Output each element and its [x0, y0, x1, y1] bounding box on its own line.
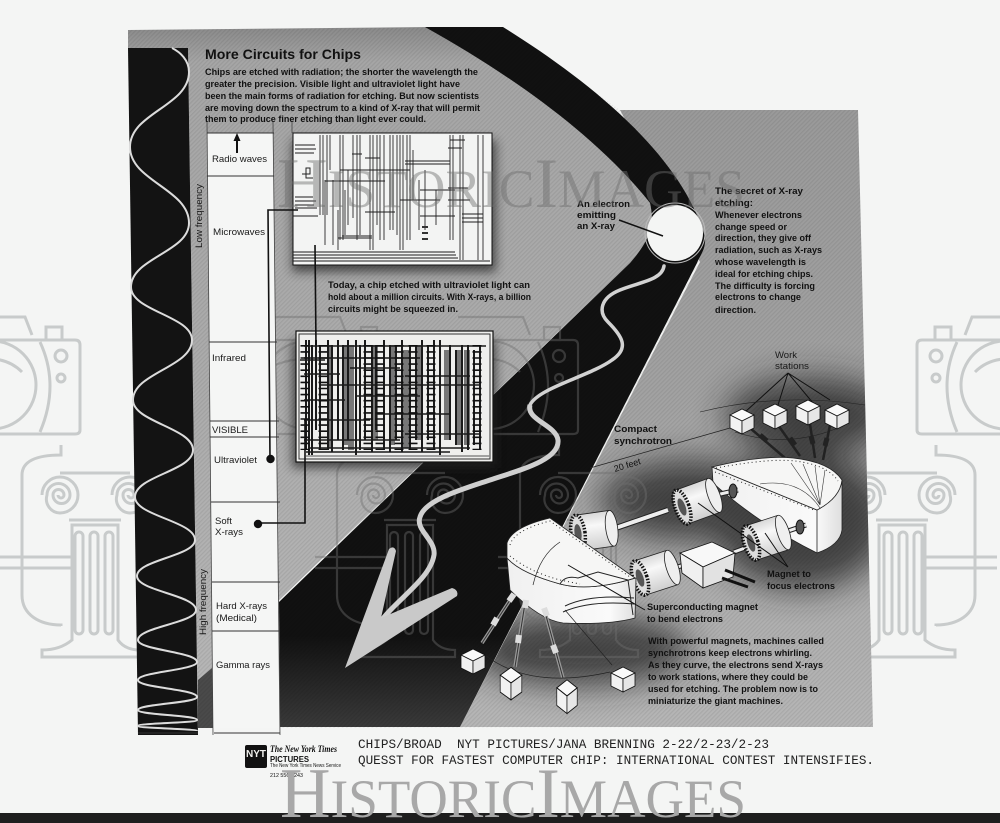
text: the secret of x-ray etching: [714, 186, 822, 315]
connector: ultraviolet to first chip: [267, 210, 298, 462]
spectrum label: microwaves: Microwaves: [213, 227, 265, 238]
label: electron emitting x-ray: an X-ray: [577, 221, 616, 231]
text: the secret of x-ray etching: electrons to change: [715, 292, 801, 302]
label: superconducting magnet: [647, 602, 758, 624]
magnet cylinder: lower right: [739, 514, 795, 562]
dimension line: 20 feet: 20 feet: [613, 456, 642, 474]
rods: [610, 490, 806, 570]
panel: left gray background: [128, 27, 652, 728]
spectrum label: hard x-rays: (Medical): [216, 613, 257, 624]
text: the secret of x-ray etching: Whenever electrons: [715, 210, 802, 220]
label: magnet to focus electrons: [767, 569, 835, 591]
axis label: high frequency: High frequency: [198, 569, 209, 635]
dimension line: 20 feet: [590, 428, 730, 474]
callout line: electron: [619, 220, 663, 236]
logo: NYT Pictures: The New York Times News Service: [270, 763, 341, 769]
diagram: compact synchrotron machine: [461, 400, 865, 714]
text: with powerful magnets: [648, 636, 824, 706]
intro paragraph: them to produce finer etching than light ever could.: [205, 114, 426, 124]
chip shadows: [292, 140, 496, 468]
text: with powerful magnets: synchrotrons keep electrons whirling.: [648, 648, 812, 658]
chart: chip etched with x-rays: [296, 331, 493, 462]
intro paragraph: Chips are etched with radiation; the shorter the wavelength the: [205, 67, 478, 77]
label: magnet to focus electrons: Magnet to: [767, 569, 811, 579]
central box: [680, 542, 755, 588]
spectrum label: soft x-rays: X-rays: [215, 527, 243, 538]
caption: typed credits: CHIPS/BROAD NYT PICTURES/JANA BRENNING 2-22/2-23/2-23: [358, 738, 769, 752]
intro paragraph: are moving down the spectrum to a kind of X-ray that will permit: [205, 103, 480, 113]
spectrum label: infrared: Infrared: [212, 353, 246, 364]
chart: chip etched with ultraviolet light: [293, 133, 492, 265]
logo: NYT Pictures: [245, 744, 341, 779]
label: electron emitting x-ray: [577, 199, 630, 231]
label: electron emitting x-ray: An electron: [577, 199, 630, 209]
spectrum label: gamma rays: Gamma rays: [216, 660, 270, 671]
text: the secret of x-ray etching: ideal for etching chips.: [715, 269, 813, 279]
dark triangle behind spectrum: [198, 668, 214, 728]
right bending magnet: [712, 457, 842, 553]
work station cubes: upper: [730, 400, 849, 434]
label: superconducting magnet: Superconducting magnet: [647, 602, 758, 612]
text: today a chip etched: Today, a chip etched with ultraviolet light can: [328, 280, 530, 290]
upper beamlines: [700, 400, 865, 460]
watermark: left camera and column: [0, 317, 148, 657]
callout lines: work stations: [745, 373, 830, 412]
callout lines: magnets: [568, 503, 788, 610]
work station cubes: lower: [461, 649, 635, 714]
dark curved band: [279, 27, 705, 727]
spectrum label: radio waves: Radio waves: [212, 154, 267, 165]
label: work stations: Work: [775, 350, 797, 361]
intro paragraph: greater the precision. Visible light and ultraviolet light have: [205, 79, 460, 89]
x-ray squiggle arrow: [345, 266, 664, 668]
electron circle: [645, 203, 705, 263]
text: the secret of x-ray etching: change speed or: [715, 222, 787, 232]
magnet cylinder: upper left: [569, 510, 620, 552]
left bending magnet: [507, 518, 636, 623]
logo: NYT Pictures: PICTURES: [270, 755, 310, 764]
spectrum label: soft x-rays: Soft: [215, 516, 232, 527]
label: compact synchrotron: [614, 424, 672, 446]
title: More Circuits for Chips: [205, 46, 361, 62]
text: the secret of x-ray etching: The secret of X-ray: [715, 186, 804, 196]
label: superconducting magnet: to bend electrons: [647, 614, 723, 624]
text: the secret of x-ray etching: The difficulty is forcing: [715, 281, 815, 291]
caption: typed credits: QUESST FOR FASTEST COMPUTER CHIP: INTERNATIONAL CONTEST INTENSIFIES.: [358, 754, 874, 768]
text: the secret of x-ray etching: radiation, such as X-rays: [715, 245, 822, 255]
black spectrum band: [128, 48, 198, 735]
logo: NYT Pictures: 212 556-7243: [270, 773, 303, 779]
icon: up arrow: [234, 133, 240, 153]
panel: right gray background: [460, 110, 873, 727]
watermark: right camera and column: [849, 317, 1000, 657]
bottom dark edge: [0, 813, 1000, 823]
text: today a chip etched: hold about a million circuits. With X-rays, a billion: [328, 292, 531, 302]
label: magnet to focus electrons: focus electrons: [767, 581, 835, 591]
text: with powerful magnets: As they curve, the electrons send X-rays: [648, 660, 823, 670]
text: the secret of x-ray etching: whose wavelength is: [714, 257, 806, 267]
label: work stations: stations: [775, 361, 809, 372]
spectrum label: soft x-rays: [215, 516, 243, 538]
label: compact synchrotron: synchrotron: [614, 436, 672, 446]
intro paragraph: [205, 67, 480, 124]
text: with powerful magnets: miniaturize the giant machines.: [648, 696, 783, 706]
spectrum label: ultraviolet: Ultraviolet: [214, 455, 257, 466]
machine shadows: [470, 377, 895, 686]
label: work stations: [775, 350, 809, 372]
halftone texture: [128, 27, 873, 728]
axis label: low frequency: Low frequency: [194, 184, 205, 248]
text: the secret of x-ray etching: direction, they give off: [715, 233, 812, 243]
text: the secret of x-ray etching: direction.: [715, 305, 756, 315]
lower beamlines: [482, 594, 612, 678]
magnet cylinder: upper right: [669, 476, 726, 526]
text: today a chip etched: circuits might be squeezed in.: [328, 304, 458, 314]
logo: NYT Pictures: NYT: [246, 749, 266, 760]
intro paragraph: been the main forms of radiation for etching. But now scientists: [205, 91, 479, 101]
wave: electromagnetic frequency curve: [130, 48, 197, 731]
spectrum label: hard x-rays: Hard X-rays: [216, 601, 267, 612]
connector: soft x-rays to second chip: [255, 245, 316, 527]
spectrum label: hard x-rays: [216, 601, 267, 624]
caption: typed credits: [358, 738, 874, 768]
logo: NYT Pictures: The New York Times: [270, 744, 337, 754]
ends of rods: [729, 484, 804, 534]
text: with powerful magnets: With powerful magnets, machines called: [648, 636, 824, 646]
text: with powerful magnets: used for etching. The problem now is to: [648, 684, 818, 694]
label: compact synchrotron: Compact: [614, 424, 657, 434]
watermark: top HistoricImages: HISTORICIMAGES: [277, 145, 745, 223]
panel: spectrum column: [138, 122, 292, 735]
text: today a chip etched: [328, 280, 531, 314]
magnet cylinder: lower left: [628, 549, 684, 597]
label: electron emitting x-ray: emitting: [577, 210, 616, 220]
watermark: center columns: [225, 317, 646, 657]
text: with powerful magnets: to work stations, where they could be: [648, 672, 808, 682]
text: the secret of x-ray etching: etching:: [715, 198, 753, 208]
spectrum label: visible: VISIBLE: [212, 425, 248, 436]
